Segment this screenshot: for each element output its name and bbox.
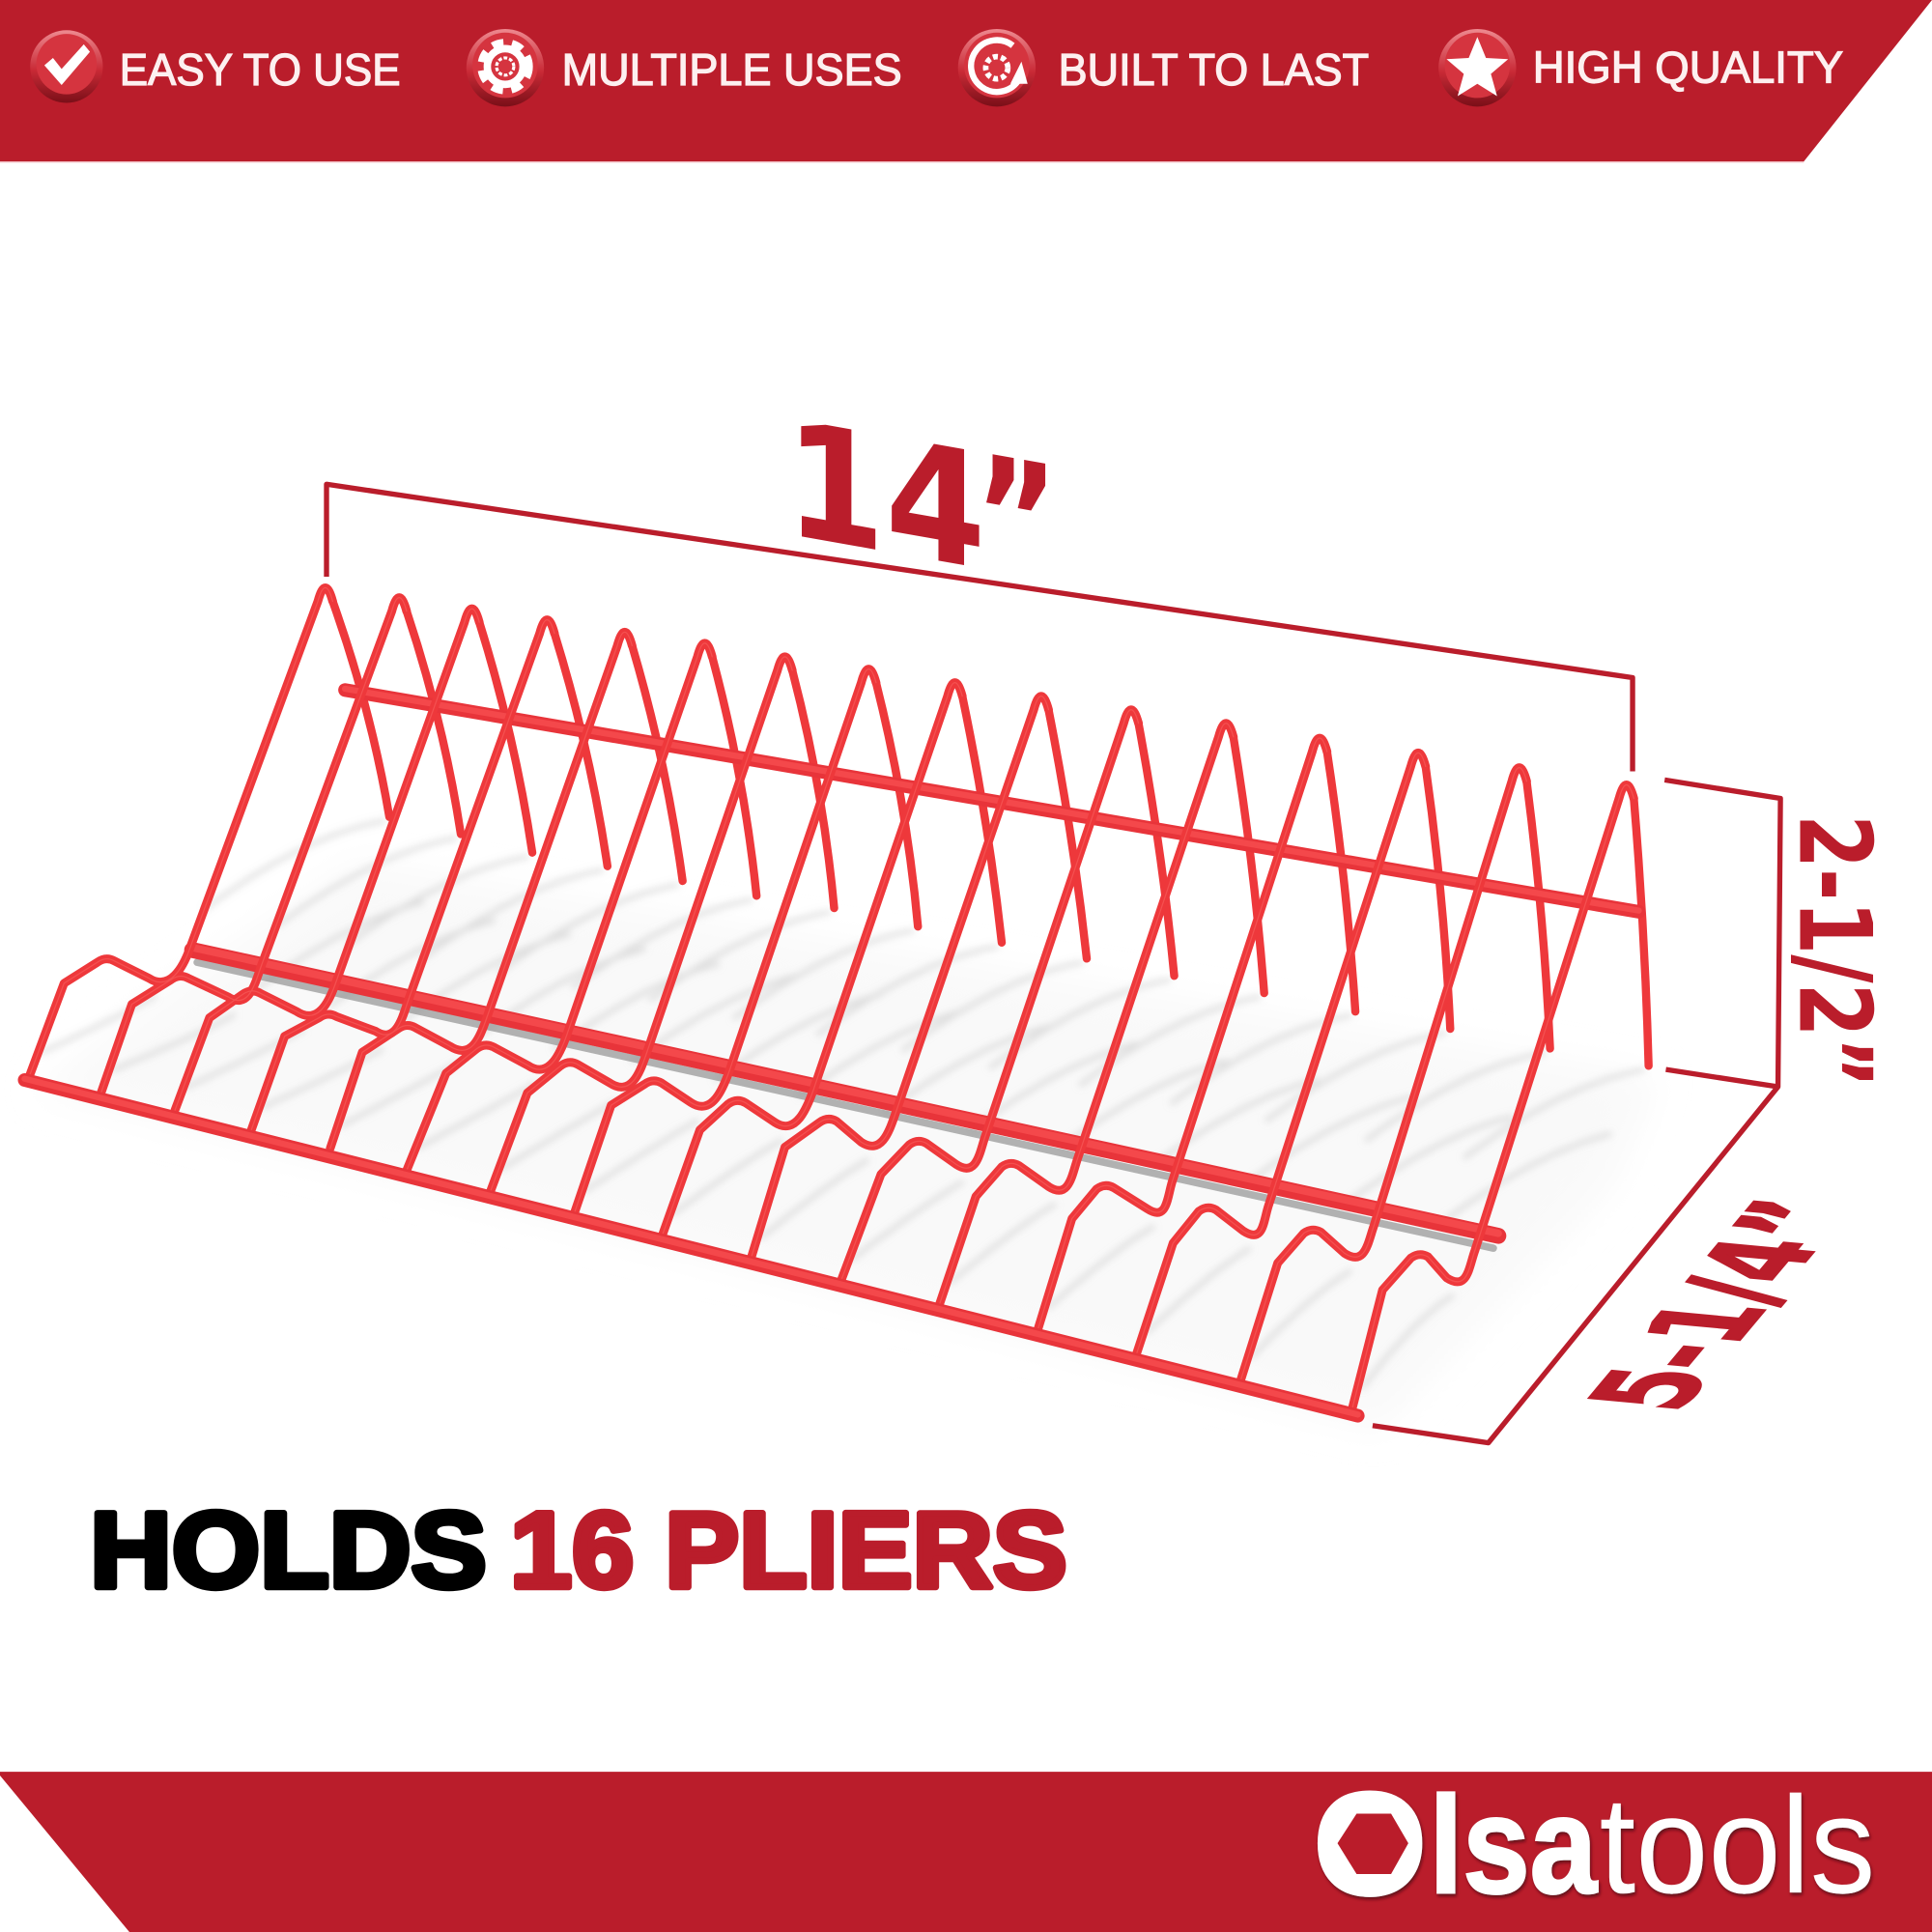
back legs <box>332 601 1649 1065</box>
upper crossbar rod <box>345 689 1638 912</box>
badge: high quality <box>1438 29 1843 106</box>
front rod <box>25 1079 1358 1416</box>
floor shadow <box>37 820 1658 1430</box>
dimension bracket: depth <box>1373 1087 1778 1443</box>
headline: holds 16 pliers: HOLDS <box>90 1491 487 1610</box>
badge: built to last <box>958 29 1369 106</box>
badge: easy to use: EASY TO USE <box>120 44 401 95</box>
badge: built to last: BUILT TO LAST <box>1059 44 1369 95</box>
dimension bracket: width <box>327 484 1633 771</box>
dimension label: 2-1/2 inches: 2-1/2” <box>1776 814 1892 1088</box>
dimension label: 14 inches: ” <box>975 420 1059 620</box>
wire rack <box>25 587 1649 1416</box>
headline: holds 16 pliers <box>90 1491 1067 1610</box>
logo: Olsatools: O <box>1314 1762 1427 1924</box>
badge: easy to use <box>30 30 401 103</box>
lower crossbar rod <box>192 948 1498 1248</box>
bottom banner <box>0 1772 1932 1932</box>
wire frames <box>30 587 1634 1410</box>
badge: multiple uses <box>467 29 902 106</box>
logo: Olsatools <box>1314 1762 1875 1924</box>
badge: multiple uses: MULTIPLE USES <box>562 44 902 95</box>
logo: Olsatools: lsa <box>1430 1769 1598 1922</box>
headline: holds 16 pliers: 16 PLIERS <box>510 1491 1067 1610</box>
dimension bracket: height <box>1664 780 1780 1087</box>
badge: high quality: HIGH QUALITY <box>1533 42 1843 92</box>
wire highlights <box>30 587 1634 1410</box>
dimension label: 14 inches: 14 <box>784 386 985 608</box>
top banner <box>0 0 1932 162</box>
dimension label: 5-1/4 inches: 5-1/4” <box>1558 1193 1886 1416</box>
logo: Olsatools: tools <box>1600 1769 1875 1922</box>
